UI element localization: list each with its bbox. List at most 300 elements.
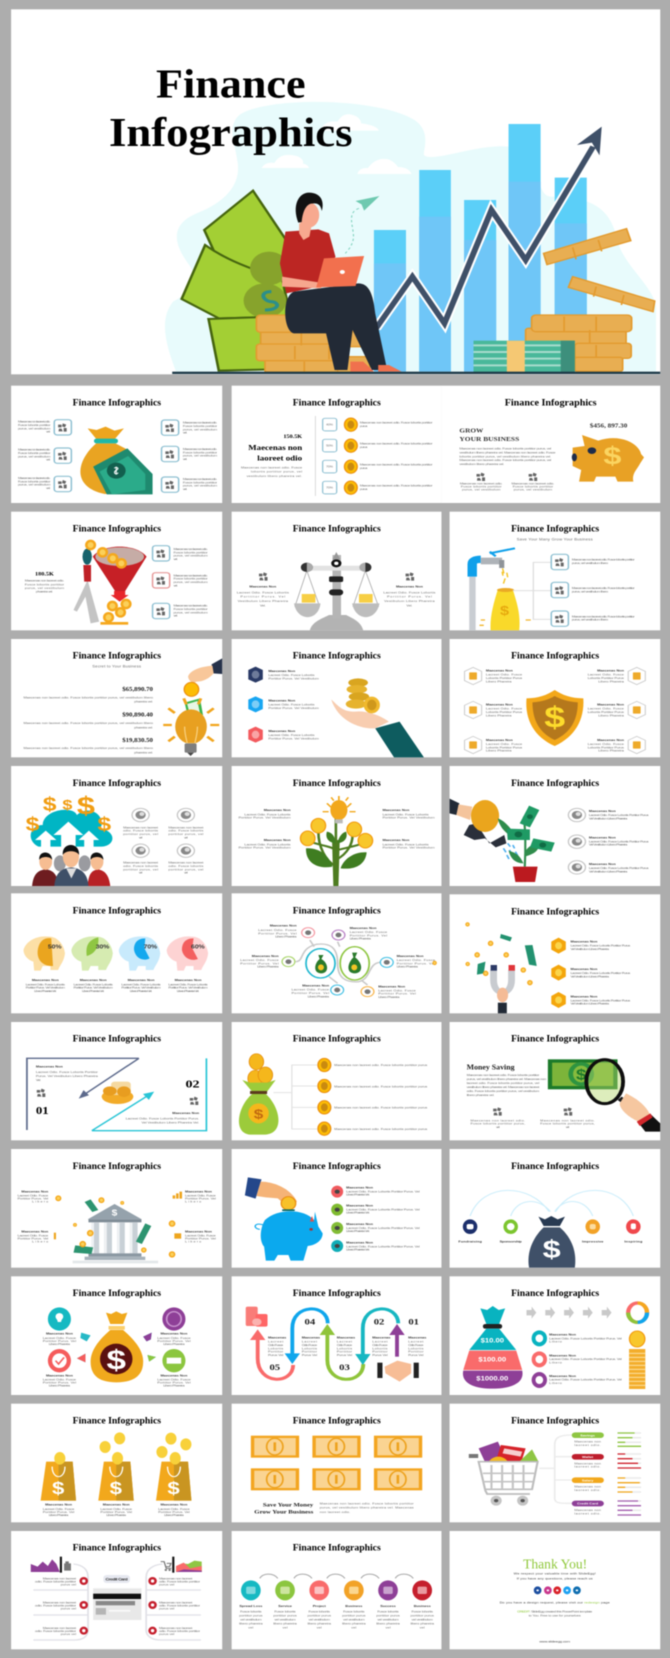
captions: Libero Pharetra Vel. bbox=[34, 989, 56, 993]
text blocks: Maecenas non laoreet odio. Fusce lobortis porttitor bbox=[572, 615, 636, 618]
icon boxes bbox=[153, 546, 170, 619]
right text: Porttitor Purus. Vel bbox=[387, 595, 432, 599]
text blocks: Maecenas Non bbox=[382, 808, 409, 812]
text blocks: Lacreet Odio. Fusce Lobortis bbox=[382, 813, 429, 816]
icons with captions: Fusce lobortis porttitor purus, bbox=[540, 1122, 595, 1126]
right coins bbox=[526, 229, 655, 371]
hexagon list: Vel Vestibulum Libero Pharetra bbox=[571, 975, 609, 978]
body text: Maecenas non laoreet odio. Fusce lobortis porttitor purus, vel bbox=[459, 458, 552, 462]
panel: magnet bbox=[432, 894, 660, 1013]
title: Finance Infographics bbox=[293, 1288, 381, 1299]
coin icons with text: odio. Fusce lobortis bbox=[168, 829, 204, 833]
labelled pills: laoreet odio. bbox=[574, 1465, 601, 1469]
list: Libero Pharetra Vel. bbox=[346, 1211, 370, 1215]
small icons and captions: Fusce lobortis porttitor bbox=[461, 485, 502, 489]
hexagon list: Lacreet Odio. Fusce Lobortis Porttitor Purus bbox=[571, 971, 631, 975]
percentage rows: Maecenas non laoreet odio. Fusce lobortis porttitor bbox=[360, 463, 433, 467]
captions: Maecenas Non bbox=[80, 978, 107, 982]
left coin stack bbox=[256, 315, 370, 372]
numbers: 02 bbox=[374, 1317, 385, 1327]
text blocks: Maecenas non laoreet odio. bbox=[18, 420, 50, 424]
column texts: Business bbox=[414, 1604, 431, 1608]
title: Finance Infographics bbox=[511, 1034, 599, 1044]
text and icons: Porttitor Purus. Vel bbox=[185, 1237, 216, 1240]
text blocks: vel. bbox=[46, 486, 50, 490]
hexagon list: Lacreet Odio. Fusce Lobortis bbox=[268, 733, 315, 737]
caption: non laoreet odio. bbox=[320, 1510, 350, 1514]
heading text: vestibulum libero pharetra vel. bbox=[247, 474, 302, 478]
coin icons with text: porttitor purus, vel bbox=[168, 832, 204, 836]
area charts bbox=[31, 1557, 202, 1573]
step texts: Lobortis bbox=[302, 1347, 317, 1350]
ground line bbox=[172, 372, 660, 374]
text and icons: Maecenas Non bbox=[21, 1230, 48, 1233]
text blocks: Porttitor Purus. Vel Vestibulum bbox=[382, 816, 435, 820]
captions: Libero Pharetra Vel. bbox=[177, 989, 199, 993]
captions: Lacreet Odio. Fusce bbox=[43, 1378, 76, 1382]
labelled pills: laoreet odio. bbox=[574, 1443, 601, 1447]
captions: Lacreet Odio. Fusce bbox=[100, 1507, 132, 1511]
captions: Maecenas Non bbox=[46, 1374, 73, 1377]
text blocks: Lobortis Porttitor Purus bbox=[588, 676, 624, 680]
title: Finance Infographics bbox=[73, 1288, 161, 1299]
list: Libero bbox=[549, 1361, 562, 1364]
labelled pills: Maecenas non bbox=[574, 1462, 601, 1465]
text blocks: purus, vel vestibulum libero bbox=[572, 561, 608, 565]
column texts: vel vestibulum bbox=[412, 1618, 433, 1622]
coin icons with text: odio. Fusce lobortis bbox=[123, 864, 158, 868]
layered bag: $100.00 bbox=[478, 1357, 506, 1363]
panel: money bag bbox=[11, 386, 222, 503]
title: Finance Infographics bbox=[73, 1543, 161, 1553]
text blocks: Fusce lobortis porttitor bbox=[174, 551, 209, 554]
bag 1 bbox=[41, 1452, 76, 1501]
body text: odio. Fusce lobortis porttitor purus, vel vestibulum bbox=[467, 1089, 539, 1093]
credit card graphic bbox=[93, 1575, 141, 1620]
text blocks: Porttitor Purus. Vel Vestibulum bbox=[382, 846, 435, 850]
bag 3: $ bbox=[167, 1479, 180, 1498]
column texts: vel bbox=[385, 1626, 391, 1630]
coin rows with text: Maecenas non laoreet odio. Fusce lobortis porttitor purus bbox=[334, 1063, 428, 1067]
connectors bbox=[274, 1065, 317, 1129]
panel: two arrows bbox=[11, 1022, 222, 1140]
icons with captions: Fusce lobortis porttitor purus, bbox=[471, 1122, 525, 1126]
heading text: 150.5K bbox=[283, 435, 302, 440]
step texts: Lacreet bbox=[337, 1340, 352, 1344]
cash bundle bbox=[474, 341, 575, 372]
text blocks: Libero Pharetra bbox=[397, 965, 418, 969]
cart illustration bbox=[469, 1442, 538, 1506]
labelled pills: Wallet bbox=[582, 1455, 594, 1459]
text blocks: Lacreet Odio. Fusce bbox=[291, 988, 329, 992]
text blocks: Lacreet Odio. Fusce bbox=[486, 673, 522, 677]
cloud with arrows: $ bbox=[43, 793, 57, 815]
text blocks: Libero Pharetra bbox=[257, 965, 279, 969]
captions: Lacreet Odio. Fusce Lobortis bbox=[121, 983, 161, 986]
hexagon list: Maecenas Non bbox=[268, 729, 295, 733]
panel: bank bbox=[11, 1149, 222, 1268]
list: Maecenas Non bbox=[346, 1204, 373, 1208]
left text: Porttitor Purus. Vel bbox=[240, 595, 286, 599]
connectors bbox=[539, 1435, 572, 1503]
title: Finance Infographics bbox=[293, 524, 381, 534]
small icons and captions: Fusce lobortis porttitor bbox=[513, 485, 554, 489]
captions: Lacreet Odio. Fusce bbox=[43, 1336, 76, 1340]
hexagon list: Vel Vestibulum Libero Pharetra bbox=[571, 1002, 609, 1006]
step texts: Lacreet bbox=[408, 1340, 424, 1344]
bag 3 bbox=[156, 1433, 191, 1501]
text blocks bbox=[18, 420, 218, 491]
text blocks: Maecenas Non bbox=[252, 954, 279, 958]
text blocks: odio. Fusce lobortis porttitor bbox=[159, 1629, 201, 1633]
body text: laoreet odio. Fusce lobortis porttitor purus, vel bbox=[467, 1081, 540, 1085]
panel: thank you bbox=[450, 1531, 660, 1649]
panel: gold bag four options bbox=[11, 1276, 222, 1395]
step texts: Purus Vel bbox=[408, 1353, 424, 1357]
text blocks: vel. bbox=[46, 430, 50, 434]
column texts: Fusce lobortis bbox=[274, 1610, 296, 1614]
text blocks: vel. bbox=[174, 614, 178, 618]
message bbox=[514, 1572, 596, 1581]
step texts: Maecenas bbox=[372, 1336, 391, 1340]
captions bbox=[43, 1332, 191, 1388]
title: Finance Infographics bbox=[511, 1416, 599, 1426]
step texts: Maecenas bbox=[337, 1336, 355, 1340]
captions: Libero Pharetra bbox=[49, 1342, 70, 1346]
percentage rows: 70% bbox=[326, 486, 333, 490]
connectors bbox=[513, 562, 551, 619]
heading text: laoreet odio bbox=[257, 454, 302, 462]
column texts: Spread Loss bbox=[239, 1604, 262, 1608]
text blocks bbox=[240, 924, 435, 999]
cloud with arrows bbox=[26, 792, 112, 847]
step texts: Porttitor bbox=[302, 1350, 318, 1354]
step texts: Lacreet bbox=[302, 1340, 317, 1344]
text blocks: Libero Pharetra bbox=[486, 680, 512, 683]
stat text: Maecenas non laoreet odio. bbox=[25, 579, 64, 583]
title: Finance Infographics bbox=[293, 1034, 381, 1044]
column texts: Service bbox=[278, 1604, 292, 1608]
text blocks: Lacreet Odio. Fusce bbox=[588, 742, 624, 746]
right text: Vestibulum Libero Pharetra bbox=[384, 599, 435, 603]
heading: GROW bbox=[459, 427, 484, 434]
coin icons with text: porttitor purus, vel bbox=[123, 868, 158, 871]
panel: balance scale bbox=[232, 512, 441, 630]
text blocks: Maecenas Non bbox=[350, 926, 376, 930]
list: Libero bbox=[549, 1381, 562, 1385]
text and icons: Libero bbox=[185, 1240, 201, 1243]
amounts: Maecenas non laoreet odio. Fusce lobortis porttitor purus, vel vestibulum libero bbox=[24, 721, 153, 725]
heading: Money Saving bbox=[467, 1062, 515, 1071]
text blocks: Maecenas non laoreet bbox=[159, 1601, 192, 1604]
coin rows with text: Maecenas non laoreet odio. Fusce lobortis porttitor purus bbox=[334, 1106, 428, 1110]
captions: Maecenas Non bbox=[103, 1503, 130, 1507]
text blocks: purus vel bbox=[61, 1583, 76, 1586]
coins and handshake icons bbox=[246, 1307, 419, 1382]
captions: Lacreet Odio. Fusce Lobortis bbox=[168, 983, 208, 986]
numbers bbox=[269, 1317, 419, 1373]
column texts: libero pharetra bbox=[239, 1622, 263, 1626]
green banknotes bbox=[182, 191, 291, 371]
list: Maecenas Non bbox=[346, 1186, 373, 1190]
coin icons with text: porttitor purus, vel bbox=[123, 832, 158, 836]
panel: blue piggy bbox=[232, 1149, 441, 1268]
percentage rows: purus bbox=[360, 487, 368, 491]
amounts: $90,890.40 bbox=[122, 712, 154, 718]
request line: Do you have a design request, please visit our redesign page bbox=[500, 1601, 610, 1605]
coin icons with text: porttitor purus, vel bbox=[168, 868, 204, 871]
panel: grow your business piggy bbox=[441, 386, 660, 503]
coin icons with text: Maecenas non laoreet bbox=[168, 861, 203, 865]
credit line: to You. Free to use for yourselves bbox=[529, 1614, 581, 1618]
labelled pills: Maecenas non bbox=[574, 1508, 601, 1512]
right text: Maecenas Non bbox=[396, 585, 423, 589]
hexagon icons bbox=[465, 667, 645, 754]
left text: Vel. bbox=[260, 604, 266, 608]
captions: Lacreet Odio. Fusce Lobortis bbox=[26, 983, 65, 986]
text blocks: Libero Pharetra bbox=[308, 995, 329, 998]
step texts: Lobortis bbox=[268, 1347, 284, 1350]
title: Finance Infographics bbox=[73, 651, 161, 661]
small icons and captions: purus, vel vestibulum bbox=[514, 488, 552, 492]
text blocks: Fusce lobortis porttitor bbox=[174, 607, 209, 611]
text blocks: Lobortis Porttitor Purus bbox=[588, 710, 624, 714]
text blocks: Libero Pharetra bbox=[378, 995, 400, 999]
captions: Libero Pharetra bbox=[163, 1342, 185, 1346]
text blocks: Fusce lobortis porttitor bbox=[18, 423, 51, 427]
coin icons with text: Maecenas Non bbox=[589, 809, 616, 813]
panel: maecenas percentages bbox=[232, 386, 441, 503]
step texts: Maecenas bbox=[302, 1336, 320, 1340]
step texts: Odio Fusce bbox=[302, 1343, 317, 1347]
column texts: vel vestibulum bbox=[343, 1618, 365, 1622]
text blocks: Maecenas non laoreet odio. bbox=[174, 547, 208, 551]
captions: Maecenas Non bbox=[161, 1503, 187, 1507]
panel: money saving bbox=[450, 1022, 660, 1140]
list bbox=[331, 1186, 420, 1252]
icons with captions: Maecenas non laoreet odio. bbox=[471, 1119, 525, 1122]
coin icons with text bbox=[123, 808, 204, 875]
layered bag: $10.00 bbox=[481, 1338, 504, 1344]
left text: Lacreet Odio. Fusce Lobortis bbox=[237, 591, 289, 594]
panel: watering can bbox=[450, 766, 660, 886]
gold money bag bbox=[91, 1311, 143, 1382]
title: Finance Infographics bbox=[511, 907, 599, 917]
list: Libero Pharetra Vel. bbox=[346, 1248, 370, 1251]
banknotes grid bbox=[251, 1436, 422, 1490]
hexagon list: Porttitor Purus. Vel Vestibulum bbox=[268, 677, 319, 680]
text blocks: Lobortis Porttitor Purus bbox=[486, 746, 523, 749]
captions: Libero Pharetra bbox=[164, 1513, 184, 1517]
heading text: Maecenas non laoreet odio. Fusce bbox=[241, 466, 302, 469]
step texts: Maecenas bbox=[408, 1336, 427, 1340]
captions: Maecenas Non bbox=[128, 978, 154, 982]
text blocks: Maecenas non laoreet bbox=[43, 1577, 76, 1580]
step texts: Odio Fusce bbox=[408, 1343, 424, 1347]
column texts: libero pharetra bbox=[376, 1622, 400, 1626]
numbers: 04 bbox=[304, 1317, 315, 1327]
column texts: Fusce lobortis bbox=[309, 1610, 330, 1614]
text 02: Vel Vestibulum Libero Pharetra Vel. bbox=[141, 1121, 199, 1125]
coins illustration bbox=[102, 1082, 133, 1104]
body text: vestibulum libero pharetra vel. Maecenas non laoreet odio. Fusce bbox=[459, 451, 556, 454]
labelled pills: Credit Card bbox=[577, 1502, 598, 1506]
captions: Lacreet Odio. Fusce bbox=[157, 1378, 191, 1382]
captions: Libero Pharetra bbox=[49, 1384, 70, 1388]
left text: Vestibulum Libero Pharetra bbox=[238, 599, 288, 603]
step texts: Maecenas bbox=[268, 1336, 286, 1340]
title: Finance Infographics bbox=[73, 1416, 161, 1426]
hexagon list: Maecenas Non bbox=[268, 669, 295, 673]
text blocks: purus, vel vestibulum bbox=[18, 427, 51, 430]
numbers: 01 bbox=[408, 1317, 419, 1327]
captions bbox=[43, 1503, 190, 1517]
heading text bbox=[241, 435, 303, 478]
caption: Grow Your Business bbox=[254, 1509, 314, 1515]
coin icons with text: Lacreet Odio. Fusce Lobortis Porttitor Purus bbox=[589, 813, 649, 817]
text blocks: Lacreet Odio. Fusce bbox=[240, 958, 279, 962]
growth arrow bbox=[376, 127, 602, 328]
piggy bank: $ bbox=[603, 442, 621, 470]
labelled pills bbox=[572, 1432, 604, 1515]
text blocks: vel. bbox=[183, 457, 187, 461]
labelled pills: laoreet odio. bbox=[574, 1512, 601, 1515]
captions: Porttitor Purus. Vel bbox=[157, 1381, 191, 1385]
step texts: Odio Fusce bbox=[337, 1343, 352, 1347]
stat text bbox=[25, 572, 65, 594]
amounts: $19,830.50 bbox=[122, 738, 154, 744]
captions: Porttitor Purus. Vel bbox=[43, 1510, 75, 1514]
column texts: Business bbox=[345, 1604, 362, 1608]
column texts: vel vestibulum bbox=[274, 1618, 296, 1622]
text blocks: Fusce lobortis porttitor bbox=[183, 481, 218, 484]
coin rows with text: Maecenas non laoreet odio. Fusce lobortis porttitor purus bbox=[334, 1127, 428, 1131]
list: Maecenas Non bbox=[549, 1333, 576, 1337]
body text: Maecenas non laoreet odio. Fusce lobortis porttitor bbox=[467, 1073, 540, 1077]
captions: Porttitor Purus. Vel Vestibulum bbox=[26, 986, 65, 990]
text and icons bbox=[18, 1190, 216, 1243]
text and icons: Lacreet Odio. Fusce bbox=[185, 1234, 216, 1237]
title: Finance Infographics bbox=[505, 398, 597, 408]
step texts: Porttitor bbox=[372, 1350, 389, 1354]
title: Finance Infographics bbox=[511, 1161, 599, 1172]
circle nodes with labels: Sponsorship bbox=[500, 1240, 522, 1243]
body text: vestibulum libero pharetra vel. bbox=[459, 462, 504, 466]
title: Finance Infographics bbox=[73, 524, 161, 534]
step texts: Lobortis bbox=[408, 1347, 424, 1350]
text blocks: Libero Pharetra bbox=[275, 935, 297, 939]
list: Libero Pharetra Vel. bbox=[346, 1229, 370, 1233]
text blocks: Maecenas non laoreet odio. Fusce lobortis porttitor bbox=[572, 586, 636, 590]
text blocks: Maecenas non laoreet bbox=[43, 1601, 76, 1604]
gold money bag: $ bbox=[106, 1345, 127, 1375]
step texts: Purus Vel bbox=[337, 1353, 352, 1357]
text blocks: Fusce lobortis porttitor bbox=[183, 451, 218, 454]
text and icons: Maecenas Non bbox=[185, 1190, 212, 1193]
text blocks: purus, vel vestibulum bbox=[183, 484, 217, 488]
column texts: porttitor purus bbox=[239, 1614, 263, 1618]
text blocks: Porttitor Purus. Vel bbox=[378, 992, 416, 996]
business people bbox=[32, 845, 110, 886]
text blocks: purus vel bbox=[61, 1607, 76, 1610]
panel: cloud team bbox=[11, 766, 222, 886]
title bbox=[109, 62, 353, 156]
percentage rows: purus bbox=[360, 466, 368, 470]
text blocks: Maecenas Non bbox=[597, 738, 624, 742]
piggies: 60% bbox=[191, 944, 205, 950]
text blocks: vel. bbox=[174, 584, 178, 587]
captions: Lacreet Odio. Fusce bbox=[43, 1507, 74, 1511]
column texts: vel vestibulum bbox=[377, 1618, 399, 1622]
panel: shield bbox=[450, 639, 660, 757]
heading text: lobortis porttitor purus, vel bbox=[251, 470, 302, 474]
column texts: libero pharetra bbox=[410, 1622, 434, 1626]
title: Finance Infographics bbox=[293, 1161, 381, 1172]
piggies: 70% bbox=[144, 944, 158, 950]
column texts: Fusce lobortis bbox=[377, 1610, 399, 1614]
percentage rows bbox=[323, 418, 433, 494]
text blocks: Libero Pharetra bbox=[486, 714, 512, 717]
teal frame and arrow bbox=[92, 1058, 206, 1131]
panel: hero cover bbox=[11, 9, 660, 374]
coin icons with text: odio. Fusce lobortis bbox=[168, 864, 204, 868]
bag 1: $ bbox=[52, 1479, 64, 1498]
grey arrows bbox=[526, 1307, 612, 1319]
title: Finance Infographics bbox=[293, 1416, 381, 1426]
right text: Vel. bbox=[406, 604, 412, 608]
hexagon list: Porttitor Purus. Vel Vestibulum bbox=[268, 737, 319, 740]
small icons and captions: purus, vel vestibulum bbox=[462, 488, 501, 492]
hexagon list: Maecenas Non bbox=[571, 940, 597, 944]
stat text: Fusce lobortis porttitor bbox=[25, 583, 65, 586]
text blocks: Maecenas non laoreet odio. bbox=[18, 448, 50, 452]
tap and bottle bbox=[469, 548, 531, 630]
icons with captions: vel bbox=[566, 1125, 569, 1129]
right text bbox=[383, 572, 436, 608]
text blocks: Libero Pharetra bbox=[486, 749, 512, 753]
amounts: Maecenas non laoreet odio. Fusce lobortis porttitor purus, vel vestibulum libero bbox=[24, 696, 153, 699]
percentage rows: Maecenas non laoreet odio. Fusce lobortis porttitor bbox=[360, 421, 433, 425]
captions: Libero Pharetra bbox=[49, 1513, 68, 1517]
captions: Lacreet Odio. Fusce bbox=[158, 1507, 190, 1511]
cloud with arrows: $ bbox=[77, 792, 95, 820]
cloud with arrows: $ bbox=[26, 813, 40, 835]
hexagon list: Maecenas Non bbox=[571, 995, 597, 998]
column texts: vel bbox=[282, 1626, 288, 1630]
text blocks: Maecenas Non bbox=[597, 669, 624, 673]
text blocks: purus, vel vestibulum bbox=[174, 554, 208, 558]
website: www.slideegg.com bbox=[539, 1640, 570, 1644]
panel: navy bag arcs bbox=[450, 1149, 660, 1268]
list: Lacreet Odio. Fusce Lobortis Porttitor Purus. Vel bbox=[549, 1337, 622, 1340]
text and icons: Porttitor Purus. Vel bbox=[18, 1237, 49, 1240]
icons with captions: vel bbox=[496, 1125, 500, 1129]
step texts: Lacreet bbox=[372, 1340, 388, 1344]
coin icons with text: Lacreet Odio. Fusce Lobortis Porttitor Purus bbox=[589, 866, 649, 870]
panel: funnel bbox=[11, 512, 222, 630]
text blocks: Maecenas Non bbox=[486, 738, 513, 742]
coin icons with text: Maecenas non laoreet bbox=[168, 826, 203, 829]
captions: Porttitor Purus. Vel bbox=[158, 1510, 190, 1514]
column texts: vel bbox=[248, 1626, 254, 1630]
step texts: Purus Vel bbox=[268, 1353, 284, 1357]
text blocks: Maecenas Non bbox=[264, 838, 291, 842]
subtitle: Secret to Your Business bbox=[92, 665, 141, 669]
hexagon list: Lacreet Odio. Fusce Lobortis bbox=[268, 703, 315, 707]
piggies: 30% bbox=[96, 944, 110, 950]
text blocks: purus, vel vestibulum libero bbox=[572, 618, 608, 622]
text blocks bbox=[238, 808, 435, 850]
